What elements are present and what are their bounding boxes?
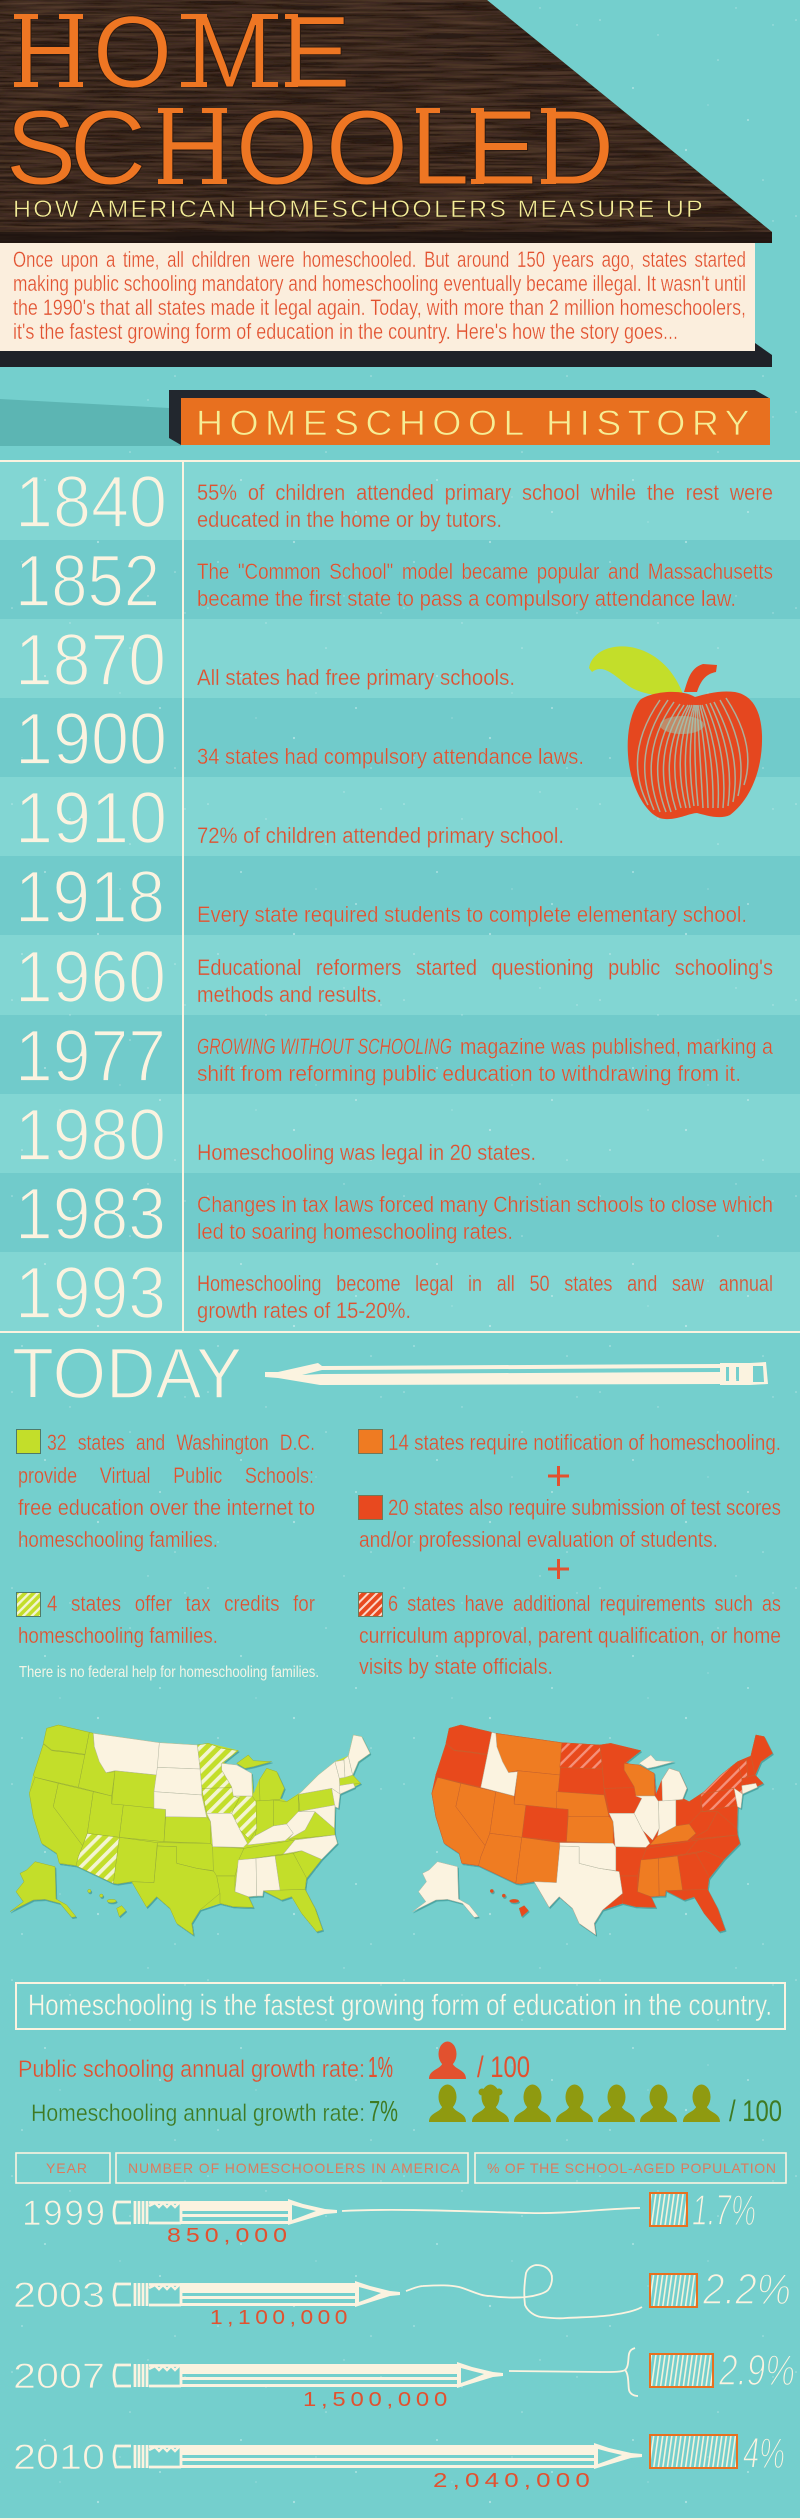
row: 1999: 1999 — [22, 2194, 105, 2233]
timeline years: 1852 — [15, 541, 160, 622]
panel: legend right column — [358, 1430, 781, 1679]
timeline years: 1980 — [15, 1095, 166, 1176]
timeline descriptions: 34 states had compulsory attendance laws. — [197, 744, 584, 769]
row: 1999: 850,000 — [167, 2225, 292, 2247]
stat: public schooling growth rate: Public schooling annual growth rate: — [18, 2056, 365, 2083]
legend text: virtual schools: 32 states and Washington D.C. — [47, 1430, 315, 1455]
icon: today pencil — [265, 1362, 768, 1385]
timeline years: 1918 — [15, 857, 165, 938]
bar: 2.2% — [650, 2274, 697, 2307]
legend text: virtual schools: free education over the internet to — [18, 1495, 315, 1520]
timeline years: 1900 — [15, 699, 167, 780]
stat: homeschooling growth rate: / 100 — [729, 2095, 782, 2128]
timeline rules — [0, 460, 800, 1333]
heading: homeschool history — [0, 390, 770, 446]
timeline descriptions: growth rates of 15-20%. — [197, 1298, 411, 1323]
table headers: NUMBER OF HOMESCHOOLERS IN AMERICA — [128, 2160, 461, 2176]
intro text — [13, 247, 746, 344]
timeline years: 1960 — [15, 937, 166, 1018]
timeline years: 1910 — [15, 778, 167, 859]
timeline descriptions: became the first state to pass a compulsory attendance law. — [197, 586, 736, 611]
legend text: tax credits: homeschooling families. — [18, 1623, 218, 1648]
legend text: tax credits — [18, 1591, 315, 1648]
timeline descriptions — [197, 480, 773, 1323]
row: 1999 — [22, 2186, 756, 2247]
timeline descriptions: methods and results. — [197, 982, 382, 1007]
row: 2003 — [13, 2265, 791, 2329]
map: state requirements — [412, 1725, 772, 1935]
bar: 2.9% — [650, 2354, 713, 2387]
row: 2003: 1,100,000 — [210, 2307, 352, 2329]
map: virtual schools and tax credits — [10, 1725, 370, 1935]
pencil: 2003 — [114, 2281, 400, 2307]
timeline years: 1993 — [15, 1253, 166, 1334]
row: 2010 — [13, 2429, 785, 2492]
panel: wood roof title block — [0, 0, 772, 243]
timeline descriptions: All states had free primary schools. — [197, 665, 515, 690]
timeline years — [15, 462, 167, 1334]
panel: intro — [0, 243, 772, 367]
stat: public schooling growth rate: 1% — [368, 2052, 393, 2084]
row: 2010: 2010 — [13, 2438, 105, 2477]
legend text: virtual schools: provide Virtual Public Schools: — [18, 1463, 314, 1488]
legend swatch: orange — [358, 1430, 382, 1454]
row: 2007 — [13, 2346, 795, 2411]
table headers: % OF THE SCHOOL-AGED POPULATION — [487, 2160, 776, 2176]
row: 2003: 2003 — [13, 2276, 105, 2315]
legend text: additional requirements — [359, 1591, 781, 1679]
title — [6, 0, 614, 207]
table headers — [16, 2153, 786, 2183]
row: 2007: 2007 — [13, 2357, 105, 2396]
stat: public schooling growth rate: / 100 — [477, 2051, 530, 2084]
timeline descriptions: led to soaring homeschooling rates. — [197, 1219, 513, 1244]
stat: homeschooling growth rate: Homeschooling annual growth rate: — [31, 2100, 365, 2127]
timeline descriptions: 72% of children attended primary school. — [197, 823, 564, 848]
pencil: 2010 — [114, 2443, 642, 2469]
row: 1999: 1.7% — [692, 2186, 756, 2235]
heading: today: TODAY — [12, 1335, 242, 1414]
timeline descriptions: Every state required students to complete elementary school. — [197, 902, 747, 927]
title: SCHOOLED — [6, 89, 614, 207]
note: no federal help: There is no federal help for homeschooling families. — [19, 1664, 319, 1681]
panel: legend left column — [16, 1430, 319, 1681]
timeline descriptions: shift from reforming public education to withdrawing from it. — [197, 1061, 741, 1086]
table headers: YEAR — [46, 2160, 87, 2176]
bar: 4% — [650, 2435, 737, 2468]
row: 2010: 2,040,000 — [433, 2470, 595, 2492]
legend text: additional requirements: visits by state officials. — [359, 1654, 553, 1679]
callout: fastest growing — [16, 1983, 785, 2029]
timeline years: 1977 — [15, 1016, 166, 1097]
legend text: test scores — [359, 1495, 781, 1552]
legend swatch: green — [16, 1430, 40, 1454]
timeline descriptions: educated in the home or by tutors. — [197, 507, 502, 532]
icon: plus — [548, 1466, 569, 1486]
icon: plus — [548, 1559, 569, 1579]
timeline descriptions: Homeschooling was legal in 20 states. — [197, 1140, 536, 1165]
pencil: 2007 — [114, 2362, 503, 2388]
timeline years: 1983 — [15, 1174, 166, 1255]
legend swatch: green hatch — [16, 1592, 40, 1616]
panel: history band stripes — [0, 461, 800, 1332]
legend swatch: red — [358, 1496, 382, 1520]
subtitle: HOW AMERICAN HOMESCHOOLERS MEASURE UP — [13, 196, 705, 223]
icon: seven people — [429, 2084, 720, 2122]
pencil: 1999 — [114, 2199, 337, 2225]
stat: homeschooling growth rate — [31, 2095, 782, 2128]
timeline years: 1870 — [15, 620, 166, 701]
legend text: virtual schools — [18, 1430, 315, 1552]
timeline years: 1840 — [15, 462, 167, 543]
stat: homeschooling growth rate: 7% — [369, 2096, 398, 2128]
stat: public schooling growth rate — [18, 2042, 530, 2084]
legend text: tax credits: 4 states offer tax credits for — [47, 1591, 315, 1616]
legend text: test scores: and/or professional evaluation of students. — [359, 1527, 718, 1552]
icon: apple — [589, 646, 762, 819]
timeline descriptions: GROWING WITHOUT SCHOOLING — [197, 1034, 452, 1059]
legend text: virtual schools: homeschooling families. — [18, 1527, 218, 1552]
heading: homeschool history: HOMESCHOOL HISTORY — [196, 404, 756, 443]
legend swatch: red hatch — [358, 1592, 382, 1616]
bar: 1.7% — [650, 2193, 687, 2226]
row: 2007: 1,500,000 — [303, 2389, 452, 2411]
